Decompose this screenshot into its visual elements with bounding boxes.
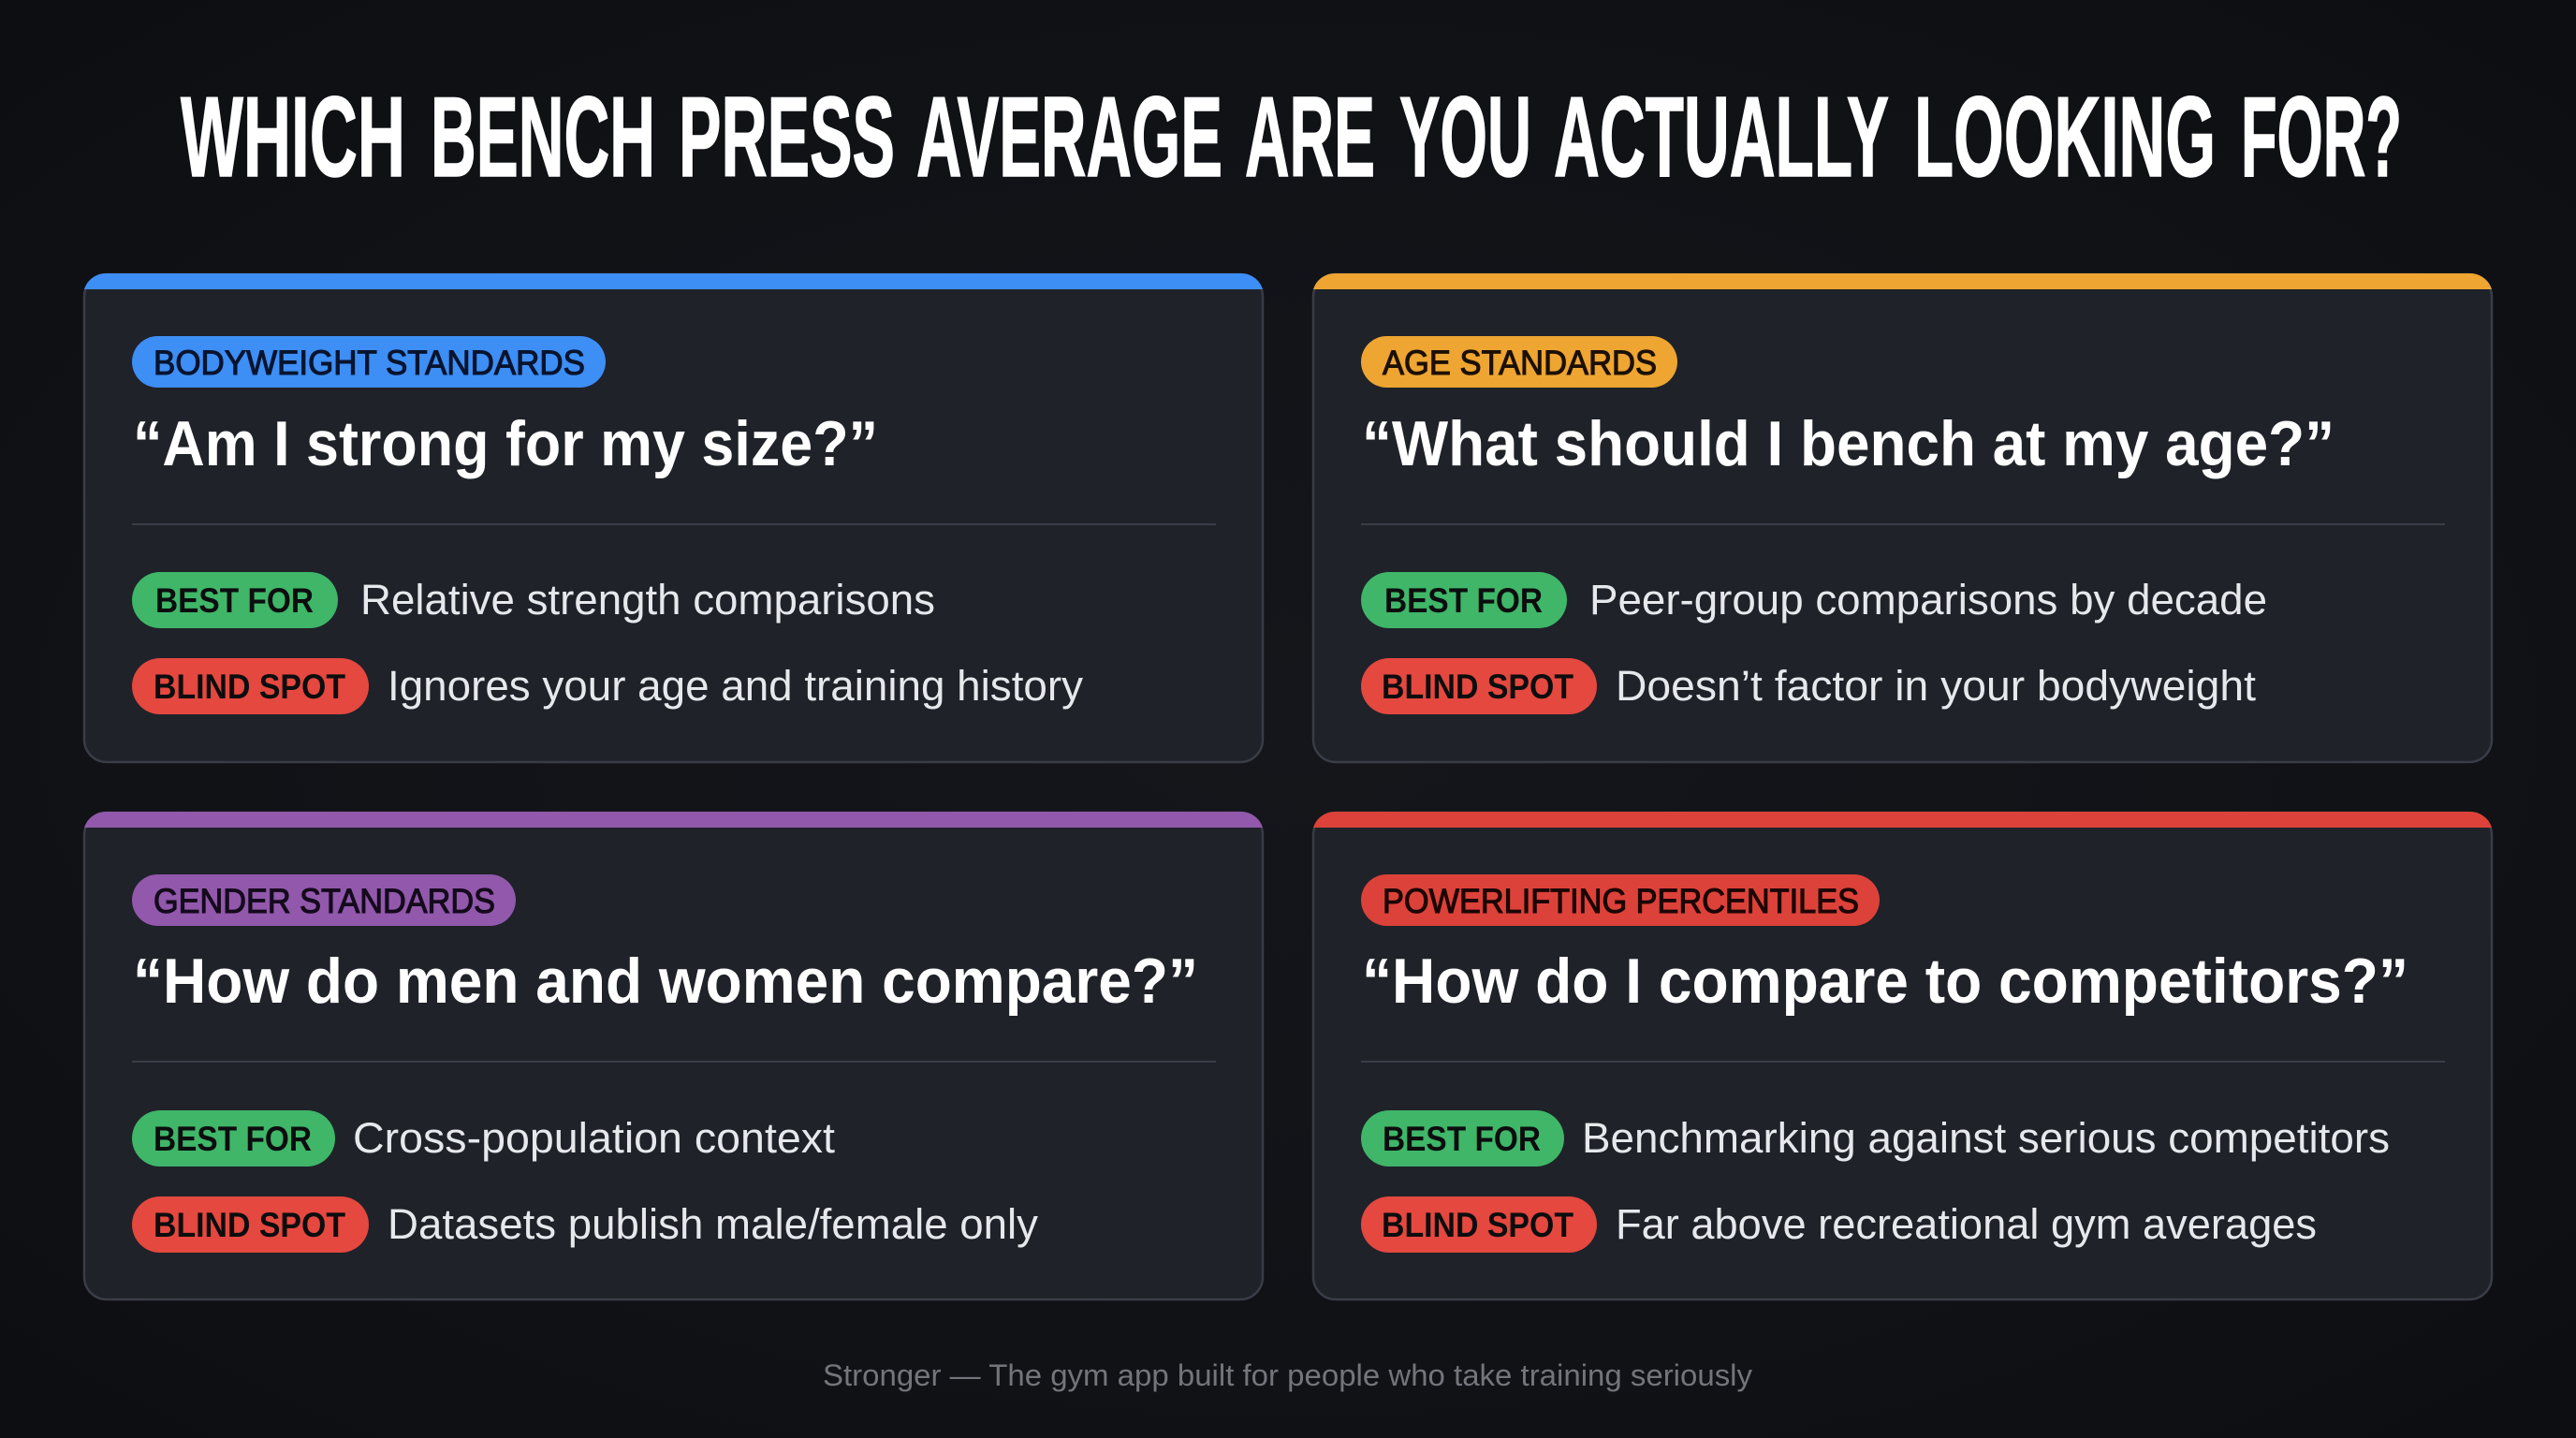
blind spot row: BLIND SPOT: [1382, 668, 1573, 706]
best for row: [1361, 572, 2267, 628]
blind spot row: [132, 658, 1084, 714]
title: PRESS: [679, 73, 895, 200]
panel: age standards: [1312, 273, 2493, 762]
tag: gender standards: [132, 874, 516, 926]
tag: age standards: AGE STANDARDS: [1383, 344, 1657, 382]
best for row: BEST FOR: [154, 1120, 312, 1158]
best for row: Peer-group comparisons by decade: [1589, 576, 2267, 624]
question: “How do men and women compare?”: [133, 946, 1198, 1017]
tag: powerlifting percentiles: [1361, 874, 1880, 926]
blind spot row: [1361, 658, 2257, 714]
blind spot row: [132, 1196, 1038, 1253]
title: [181, 73, 2402, 200]
panel: bodyweight standards: [83, 273, 1264, 762]
blind spot row: BLIND SPOT: [1382, 1206, 1573, 1244]
title: AVERAGE: [916, 73, 1222, 200]
blind spot row: Datasets publish male/female only: [388, 1200, 1038, 1248]
question: “Am I strong for my size?”: [133, 408, 878, 479]
title: YOU: [1399, 73, 1531, 200]
best for row: Relative strength comparisons: [360, 576, 935, 624]
best for row: BEST FOR: [155, 581, 314, 620]
title: WHICH: [181, 73, 405, 200]
blind spot row: [1361, 1196, 2317, 1253]
tag: bodyweight standards: BODYWEIGHT STANDARDS: [154, 344, 585, 382]
title: ARE: [1245, 73, 1375, 200]
title: ACTUALLY: [1554, 73, 1889, 200]
tag: age standards: [1361, 336, 1677, 388]
best for row: [132, 572, 935, 628]
blind spot row: BLIND SPOT: [154, 1206, 345, 1244]
blind spot row: BLIND SPOT: [154, 668, 345, 706]
title: BENCH: [431, 73, 655, 200]
best for row: [132, 1110, 836, 1167]
tag: powerlifting percentiles: POWERLIFTING PERCENTILES: [1383, 882, 1859, 920]
best for row: [1361, 1110, 2390, 1167]
tag: gender standards: GENDER STANDARDS: [154, 882, 495, 920]
blind spot row: Doesn’t factor in your bodyweight: [1616, 662, 2257, 710]
title: FOR?: [2241, 73, 2402, 200]
best for row: BEST FOR: [1383, 1120, 1541, 1158]
best for row: Benchmarking against serious competitors: [1582, 1114, 2390, 1162]
best for row: BEST FOR: [1384, 581, 1543, 620]
title: LOOKING: [1914, 73, 2216, 200]
panel: gender standards: [83, 812, 1264, 1299]
footer: Stronger — The gym app built for people who take training seriously: [823, 1358, 1752, 1392]
best for row: Cross-population context: [353, 1114, 836, 1162]
blind spot row: Ignores your age and training history: [388, 662, 1084, 710]
question: “How do I compare to competitors?”: [1362, 946, 2408, 1017]
question: “What should I bench at my age?”: [1362, 408, 2334, 479]
blind spot row: Far above recreational gym averages: [1616, 1200, 2317, 1248]
panel: powerlifting percentiles: [1312, 812, 2493, 1299]
